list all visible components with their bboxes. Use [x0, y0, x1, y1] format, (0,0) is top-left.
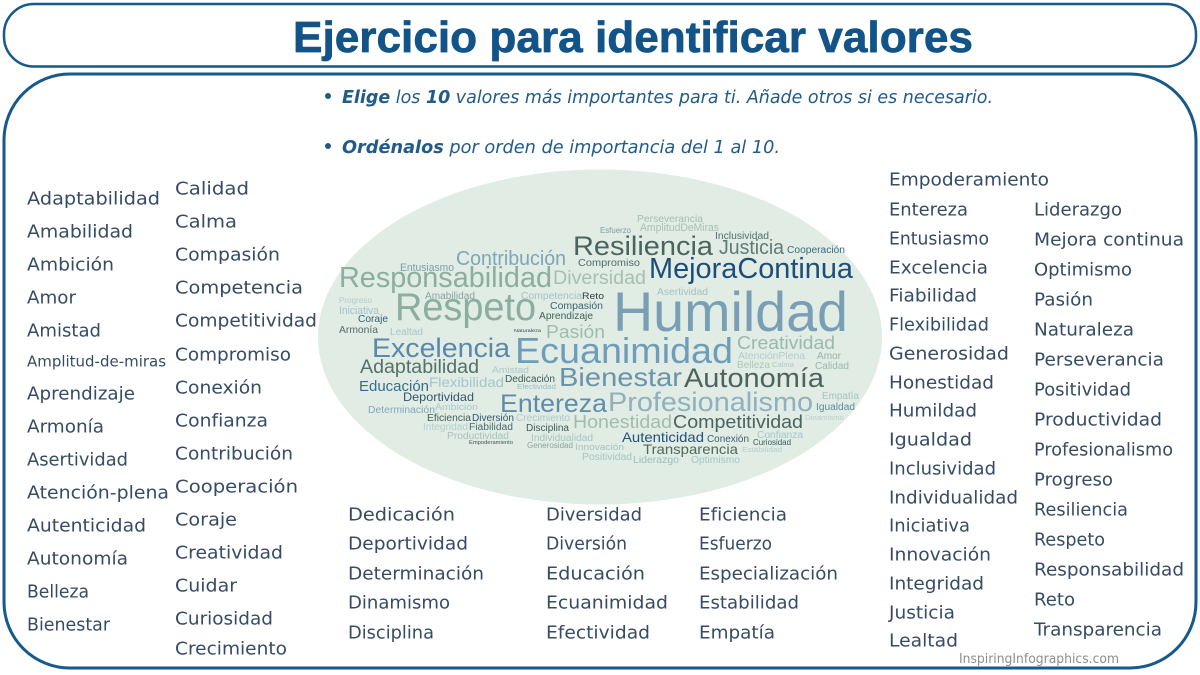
word cloud oval: Cooperación — [787, 245, 845, 256]
value list column C: Creatividad — [175, 542, 283, 563]
word cloud oval: Dinamismo — [805, 413, 844, 422]
value list column L to T: Naturaleza — [1034, 319, 1134, 340]
value list column A: Asertividad — [27, 449, 128, 470]
value list column E1: Estabilidad — [699, 592, 799, 613]
word cloud oval: Resiliencia — [573, 231, 714, 261]
word cloud oval: Empoderamiento — [469, 440, 513, 446]
word cloud oval: Coraje — [358, 313, 388, 325]
word cloud oval: Ecuanimidad — [515, 330, 733, 371]
value list column D1 — [348, 504, 484, 643]
value list column L to T: Productividad — [1034, 409, 1162, 430]
source credit: InspiringInfographics.com — [959, 652, 1119, 667]
value list column A — [27, 188, 169, 635]
title banner — [4, 4, 1196, 66]
value list column E1: Esfuerzo — [699, 533, 772, 554]
word cloud oval: Liderazgo — [633, 454, 679, 466]
value list column A: Armonía — [27, 416, 104, 437]
value list column A: Amor — [27, 287, 77, 308]
value list column A: Atención-plena — [27, 482, 169, 503]
word cloud oval: Autenticidad — [622, 429, 704, 445]
word cloud oval: Optimismo — [691, 455, 740, 466]
value list column D1: Deportividad — [348, 533, 468, 554]
word cloud oval: Belleza — [737, 359, 770, 371]
word cloud oval: Amabilidad — [425, 291, 475, 302]
word cloud oval: Autonomía — [684, 363, 825, 393]
value list column A: Aprendizaje — [27, 383, 135, 404]
instruction 1: Elige los 10 valores más importantes para ti. Añade otros si es necesario. — [342, 87, 993, 108]
value list column C: Coraje — [175, 509, 237, 530]
value list column E2 to L: Honestidad — [889, 372, 994, 393]
word cloud oval: Iniciativa — [339, 305, 380, 317]
value list column D2: Ecuanimidad — [546, 592, 668, 613]
word cloud oval: Competitividad — [673, 411, 803, 432]
word cloud oval: Eficiencia — [427, 413, 471, 424]
value list column E1: Eficiencia — [699, 504, 787, 525]
word cloud oval: Determinación — [368, 405, 435, 416]
word cloud oval: Profesionalismo — [608, 387, 813, 417]
value list column E2 to L: Generosidad — [889, 343, 1009, 364]
value list column E1: Empatía — [699, 622, 775, 643]
value list column L to T: Positividad — [1034, 379, 1131, 400]
value list column D1: Dedicación — [348, 504, 455, 525]
word cloud oval: Estabilidad — [742, 445, 782, 454]
word cloud oval: Dedicación — [505, 374, 555, 385]
word cloud oval: Respeto — [395, 286, 536, 329]
word cloud oval: Productividad — [447, 431, 509, 442]
value list column C: Cooperación — [175, 476, 298, 497]
value list column E2 to L: Igualdad — [889, 429, 972, 450]
value list column L to T: Profesionalismo — [1034, 439, 1173, 460]
value list column C: Calma — [175, 211, 237, 232]
value list column L to T: Respeto — [1034, 529, 1105, 550]
value list column A: Bienestar — [27, 614, 111, 635]
word cloud oval: Responsabilidad — [339, 262, 552, 294]
word cloud oval: AmplitudDeMiras — [640, 222, 719, 234]
value list column E2 to L: Innovación — [889, 544, 991, 565]
value list column E2 to L: Entusiasmo — [889, 228, 989, 249]
value list column D2: Diversión — [546, 533, 627, 554]
value list column C: Competitividad — [175, 310, 317, 331]
word cloud oval: Transparencia — [643, 441, 738, 457]
value list column L to T: Progreso — [1034, 469, 1113, 490]
value list column C: Curiosidad — [175, 608, 273, 629]
value list column E2 to L: Inclusividad — [889, 458, 996, 479]
word cloud oval: Entereza — [500, 390, 607, 418]
word cloud oval: Bienestar — [559, 362, 682, 392]
word cloud oval: Aprendizaje — [539, 310, 593, 322]
word cloud oval: Esfuerzo — [600, 226, 632, 235]
word cloud oval: Perseverancia — [637, 213, 703, 225]
value list column C: Confianza — [175, 410, 268, 431]
value list column C: Calidad — [175, 178, 249, 199]
word cloud oval: Confianza — [757, 430, 803, 441]
value list column L to T — [1033, 199, 1184, 640]
value list column L to T: Liderazgo — [1034, 199, 1122, 220]
value list column C — [175, 178, 317, 659]
word cloud oval: Flexibilidad — [429, 374, 504, 390]
word cloud oval: Creatividad — [737, 333, 835, 353]
value list column E2 to L: Lealtad — [889, 630, 958, 651]
value list column L to T: Optimismo — [1034, 259, 1132, 280]
word cloud oval: Excelencia — [372, 333, 511, 363]
value list column D2: Educación — [546, 563, 645, 584]
word cloud oval: Generosidad — [527, 441, 573, 450]
word cloud oval: Educación — [359, 378, 429, 395]
word cloud oval: Calidad — [815, 360, 849, 372]
word cloud oval: Entusiasmo — [400, 262, 454, 274]
word cloud oval: Disciplina — [526, 423, 569, 434]
word cloud oval: Justicia — [719, 237, 785, 259]
value list column A: Autenticidad — [27, 515, 146, 536]
value list column D1: Determinación — [348, 563, 484, 584]
value list column E2 to L: Integridad — [889, 573, 984, 594]
value list column E2 to L: Excelencia — [889, 257, 988, 278]
value list column D1: Dinamismo — [348, 592, 450, 613]
word cloud oval: Diversidad — [553, 268, 646, 289]
value list column E1: Especialización — [699, 563, 838, 584]
word cloud oval: Contribución — [456, 248, 566, 270]
value list column A: Amistad — [27, 320, 101, 341]
value list column L to T: Pasión — [1034, 289, 1093, 310]
value list column C: Compromiso — [175, 344, 291, 365]
value list column C: Competencia — [175, 277, 303, 298]
value list column D2 — [546, 504, 668, 643]
word cloud oval: Adaptabilidad — [360, 357, 479, 378]
word cloud oval: Calma — [772, 362, 794, 369]
word cloud oval: Inclusividad — [715, 231, 769, 242]
value list column E2 to L: Fiabilidad — [889, 285, 977, 306]
word cloud oval: Crecimiento — [516, 413, 570, 424]
title: Ejercicio para identificar valores — [293, 13, 973, 62]
value list column C: Compasión — [175, 244, 280, 265]
word cloud oval: Ambición — [435, 402, 478, 413]
word cloud oval: Honestidad — [573, 411, 672, 432]
value list column C: Contribución — [175, 443, 293, 464]
word cloud oval: Amistad — [492, 365, 529, 376]
word cloud oval: MejoraContinua — [649, 253, 854, 285]
value list column A: Autonomía — [27, 548, 128, 569]
word cloud oval: Compromiso — [578, 258, 640, 269]
value list column A: Amplitud-de-miras — [27, 352, 166, 370]
value list column E2 to L: Entereza — [889, 199, 968, 220]
value list column E2 to L: Individualidad — [889, 487, 1018, 508]
word cloud oval: Humildad — [613, 280, 848, 343]
value list column E2 to L: Humildad — [889, 400, 977, 421]
value list column E1 — [699, 504, 838, 643]
word cloud oval: Lealtad — [390, 327, 423, 338]
value list column L to T: Transparencia — [1033, 619, 1162, 640]
value list column A: Belleza — [27, 581, 89, 602]
word cloud oval: Efectividad — [517, 384, 556, 391]
word cloud oval: Compasión — [550, 301, 603, 312]
instruction 2: Ordénalos por orden de importancia del 1 al 10. — [342, 137, 780, 158]
word cloud oval: Individualidad — [531, 432, 593, 444]
word cloud oval: Conexión — [707, 434, 749, 445]
value list column E2 to L: Justicia — [888, 602, 955, 623]
word cloud oval: Competencia — [521, 291, 582, 302]
word cloud oval: AtenciónPlena — [738, 350, 805, 362]
word cloud oval: Fiabilidad — [469, 422, 513, 433]
word cloud oval: Armonía — [339, 324, 378, 336]
value list column L to T: Perseverancia — [1034, 349, 1164, 370]
instructions — [325, 87, 993, 158]
word cloud oval: Reto — [582, 291, 604, 302]
word cloud oval: Deportividad — [403, 390, 474, 404]
value list column L to T: Mejora continua — [1034, 229, 1184, 250]
value list column C: Conexión — [175, 377, 262, 398]
value list column E2 to L: Iniciativa — [889, 515, 970, 536]
value list column A: Amabilidad — [27, 221, 133, 242]
word cloud oval: Curiosidad — [753, 438, 791, 447]
value list column A: Ambición — [27, 254, 114, 275]
word cloud oval: Igualdad — [816, 402, 855, 413]
value list column D1: Disciplina — [348, 622, 434, 643]
value list column C: Cuidar — [175, 575, 238, 596]
value list column L to T: Resiliencia — [1034, 499, 1128, 520]
value list column E2 to L: Empoderamiento — [889, 169, 1049, 190]
value list column L to T: Responsabilidad — [1034, 559, 1184, 580]
value list column C: Crecimiento — [175, 638, 287, 659]
word cloud oval: Positividad — [582, 452, 632, 463]
value list column L to T: Reto — [1034, 589, 1075, 610]
word cloud oval: Amor — [817, 351, 842, 362]
value list column E2 to L — [888, 169, 1049, 651]
word cloud oval: Asertividad — [657, 287, 708, 298]
value list column E2 to L: Flexibilidad — [889, 314, 989, 335]
word cloud oval: Innovación — [575, 442, 624, 453]
value list column A: Adaptabilidad — [27, 188, 160, 209]
word cloud oval: Integridad — [423, 422, 468, 433]
word cloud oval: Progreso — [339, 295, 372, 305]
word cloud oval — [318, 170, 882, 504]
value list column D2: Efectividad — [546, 622, 650, 643]
value list column D2: Diversidad — [546, 504, 642, 525]
word cloud oval: Pasión — [546, 322, 605, 342]
word cloud oval: Naturaleza — [514, 328, 542, 333]
word cloud oval: Empatía — [822, 391, 859, 402]
word cloud oval: Diversión — [472, 413, 514, 424]
